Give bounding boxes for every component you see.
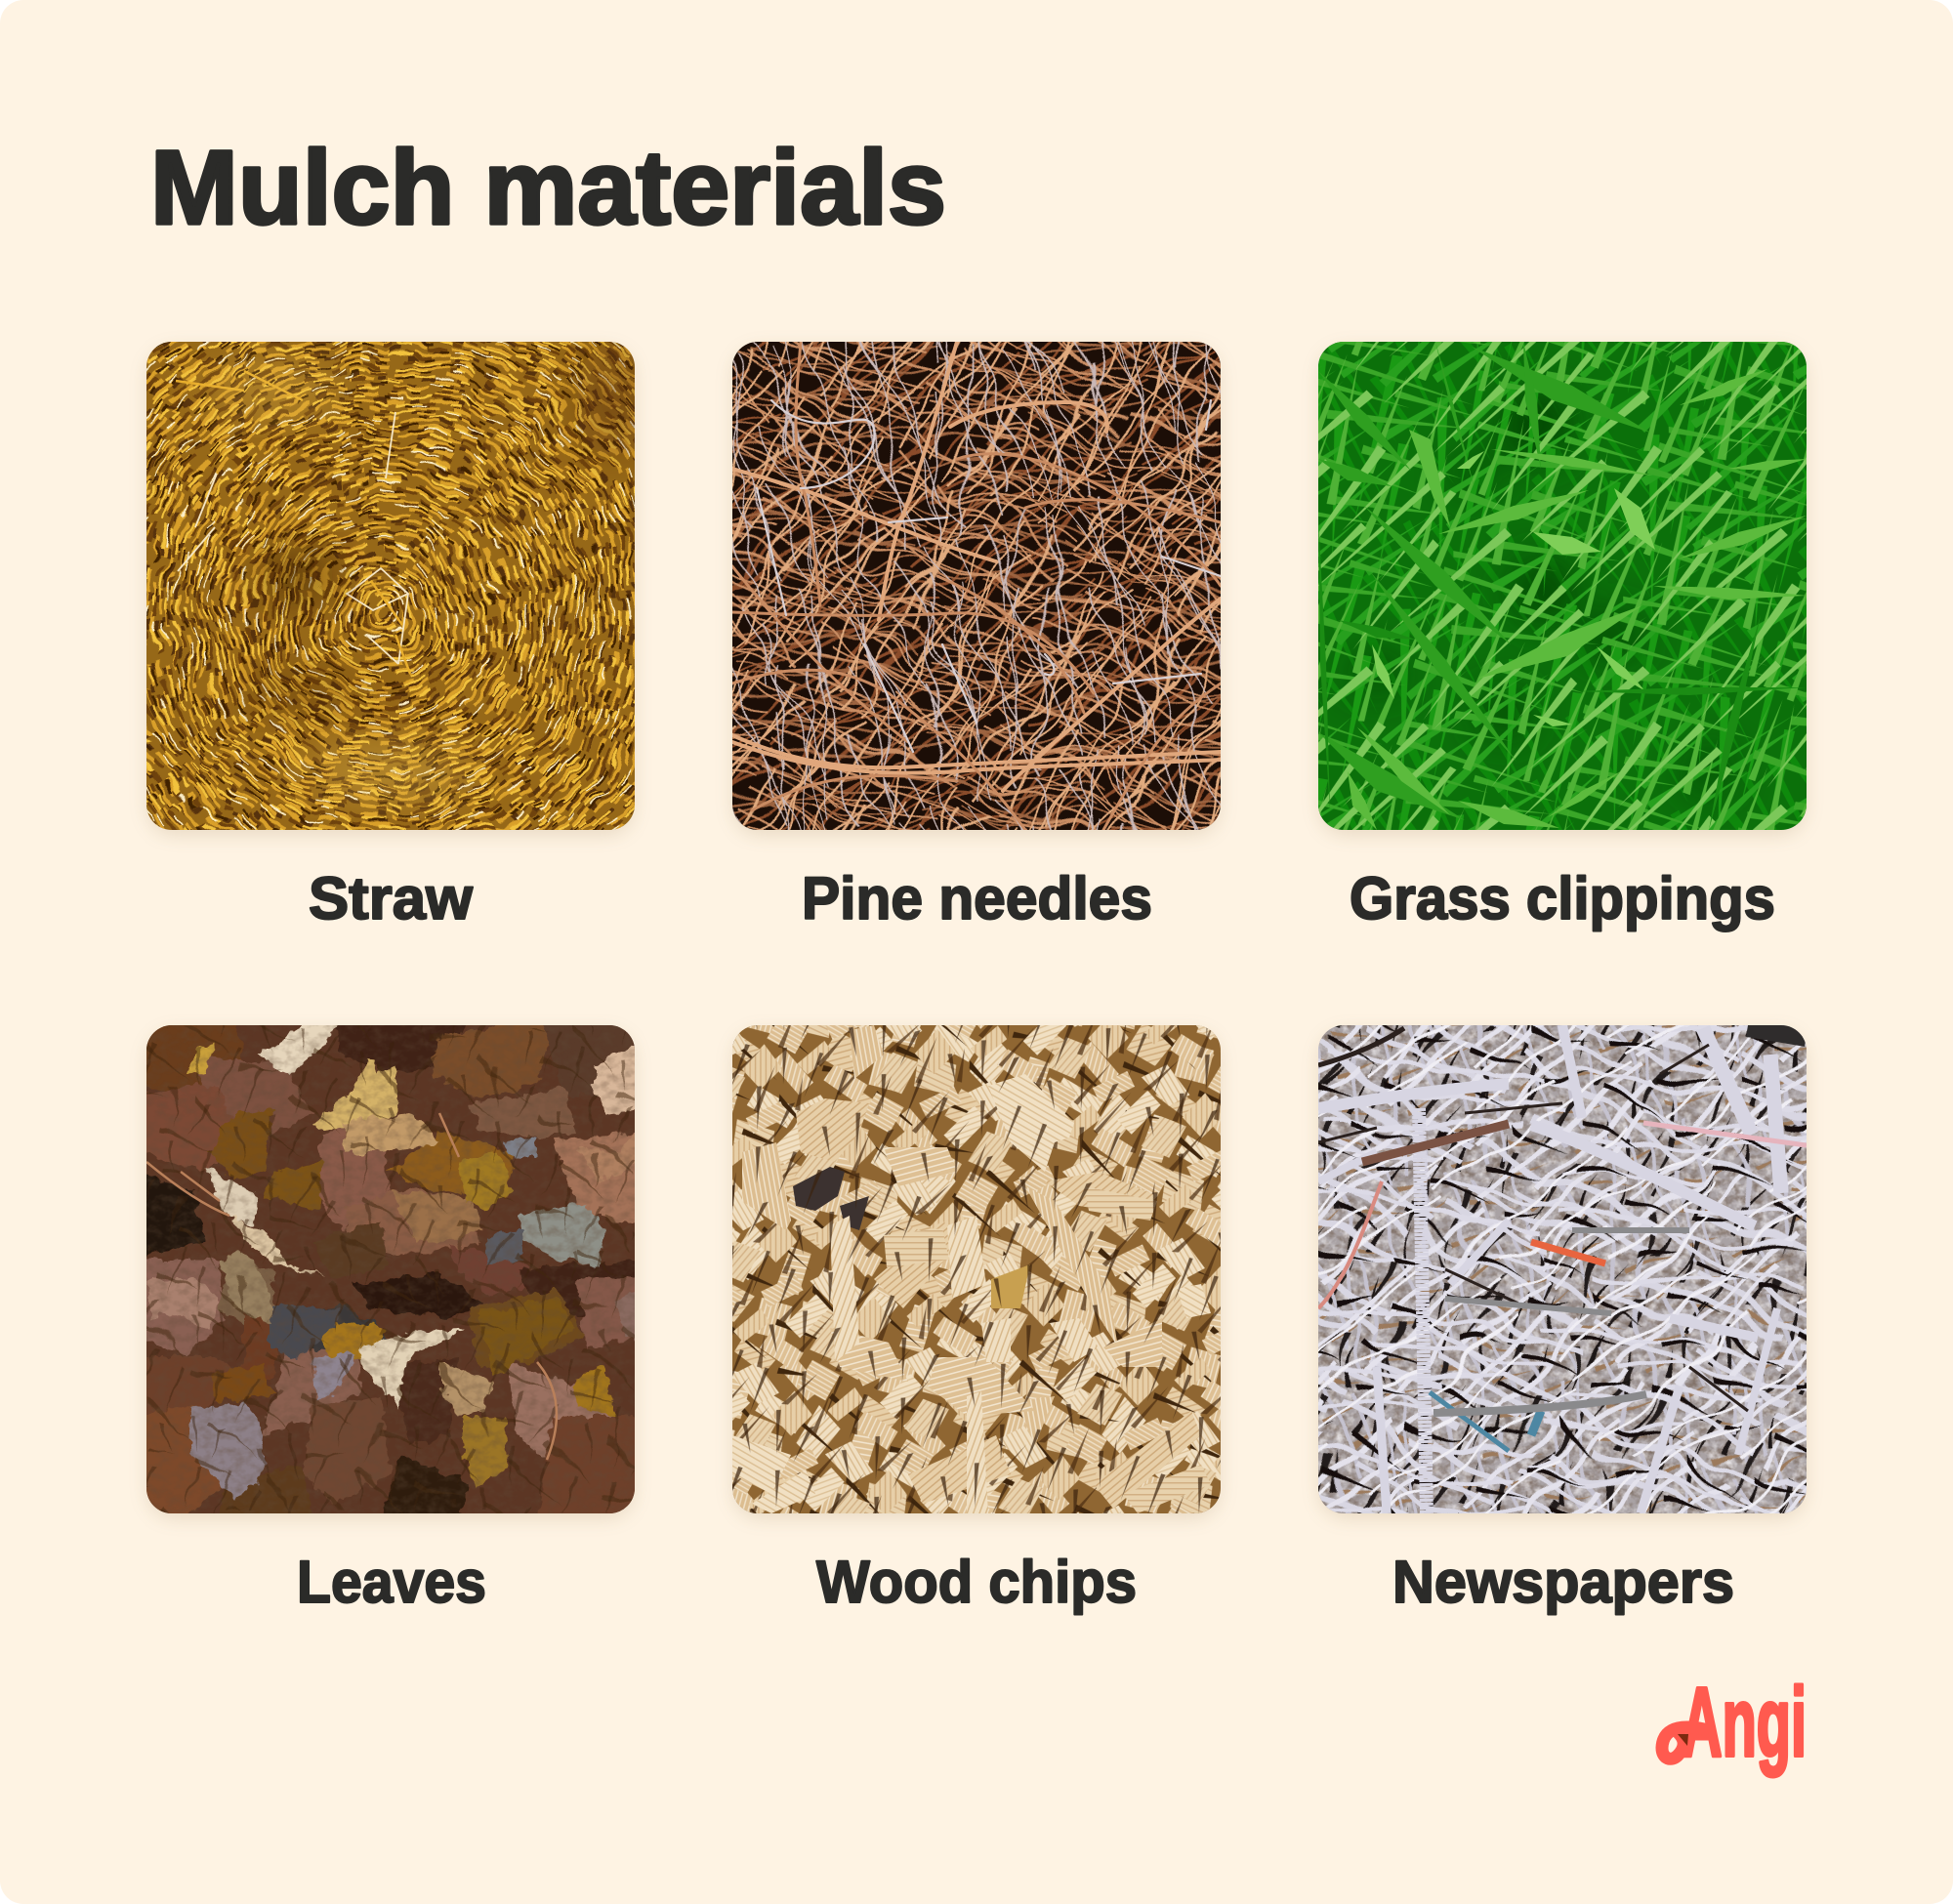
card shadow: newspapers [1320,1033,1805,1517]
label: Wood chips: Wood chips [816,1549,1137,1615]
photo: shredded newspapers [1318,1025,1807,1513]
panel: grass clippings [1318,342,1807,931]
logo: Angi: Angi [1682,1668,1807,1777]
card shadow: leaves [148,1033,633,1517]
logo: Angi [1662,1668,1807,1777]
title: Mulch materials [150,128,946,246]
label: Straw: Straw [309,865,474,931]
photo: straw swirl [146,342,635,830]
label: Leaves: Leaves [297,1549,486,1615]
card shadow: grass clippings [1320,350,1805,834]
panel: wood chips [732,1025,1221,1615]
card shadow: straw [148,350,633,834]
label: Grass clippings: Grass clippings [1350,865,1775,931]
panel: leaves [137,1015,644,1615]
label: Pine needles: Pine needles [802,865,1152,931]
panel: straw [142,342,640,920]
photo: wood chips [732,1025,1221,1513]
card shadow: wood chips [734,1033,1219,1517]
photo: grass clippings [1318,342,1807,830]
label: Newspapers: Newspapers [1392,1549,1734,1615]
photo: pine needles [732,342,1221,830]
card shadow: pine needles [734,350,1219,834]
panel: pine needles [727,342,1226,920]
panel: newspapers [1313,1025,1811,1615]
photo: leaves [137,1015,644,1523]
